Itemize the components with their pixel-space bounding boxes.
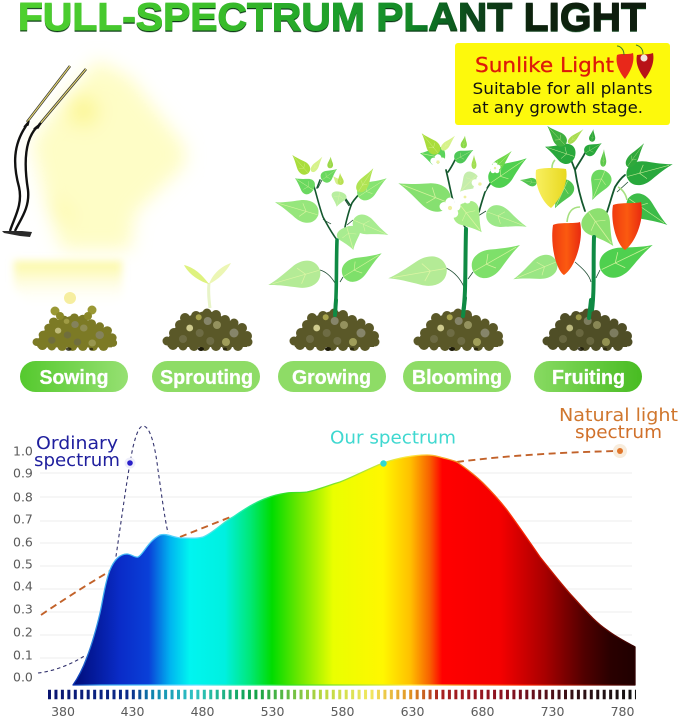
y axis labels: 0.2 — [13, 624, 33, 640]
y axis labels: 0.9 — [13, 466, 33, 480]
pill: blooming: Blooming — [412, 367, 502, 389]
natural light dashed curve — [41, 451, 618, 615]
label: natural light spectrum: spectrum — [575, 422, 662, 443]
label: natural light spectrum — [559, 405, 678, 458]
stage: sowing — [14, 261, 122, 351]
y axis labels: 1.0 — [13, 444, 33, 458]
stage: growing — [265, 151, 392, 351]
our spectrum area — [73, 455, 635, 685]
callout: sunlike light: Sunlike Light — [475, 53, 614, 77]
stage: sprouting — [162, 263, 252, 351]
label: ordinary spectrum: spectrum — [34, 450, 120, 471]
y axis labels: 0.1 — [13, 648, 33, 662]
callout: sunlike light: Suitable for all plants — [472, 79, 652, 98]
y axis labels: 0.0 — [13, 670, 33, 684]
stage: blooming — [386, 129, 533, 351]
y axis labels — [13, 444, 33, 684]
callout: sunlike light: at any growth stage. — [472, 98, 643, 117]
pill: fruiting: Fruiting — [552, 367, 625, 389]
pill: sprouting: Sprouting — [160, 367, 253, 389]
ordinary spectrum dashed curve — [38, 426, 168, 673]
icon: red pepper left — [552, 222, 581, 275]
callout: sunlike light — [455, 43, 670, 125]
icon: chili peppers — [617, 45, 653, 79]
light beam from lamp — [32, 60, 185, 250]
y axis labels: 0.4 — [13, 578, 33, 594]
label: natural light spectrum: Natural light — [559, 405, 678, 426]
pill: sowing: Sowing — [40, 367, 108, 389]
icon: red pepper right — [612, 202, 642, 250]
pill: growing — [278, 361, 386, 392]
y axis labels: 0.5 — [13, 556, 33, 572]
y axis labels: 0.8 — [13, 490, 33, 504]
y axis labels: 0.7 — [13, 512, 33, 526]
x axis labels — [51, 704, 634, 718]
label: ordinary spectrum — [34, 433, 136, 471]
icon: yellow pepper — [536, 168, 567, 208]
y axis labels: 0.6 — [13, 534, 33, 550]
label: our spectrum: Our spectrum — [330, 428, 456, 448]
pill: growing: Growing — [292, 367, 371, 389]
pill: sowing — [20, 361, 128, 392]
stage labels — [20, 361, 642, 392]
y axis labels: 0.3 — [13, 602, 33, 616]
label: our spectrum — [330, 428, 456, 467]
stage: fruiting — [509, 122, 676, 351]
panel: growth stages — [2, 60, 676, 351]
wavelength ticks — [48, 690, 636, 699]
pill: sprouting — [152, 361, 260, 392]
icon: dual-head grow lamp — [2, 66, 86, 237]
chart: spectrum — [13, 405, 678, 718]
label: ordinary spectrum: Ordinary — [36, 433, 118, 454]
pill: blooming — [403, 361, 511, 392]
pill: fruiting — [534, 361, 642, 392]
